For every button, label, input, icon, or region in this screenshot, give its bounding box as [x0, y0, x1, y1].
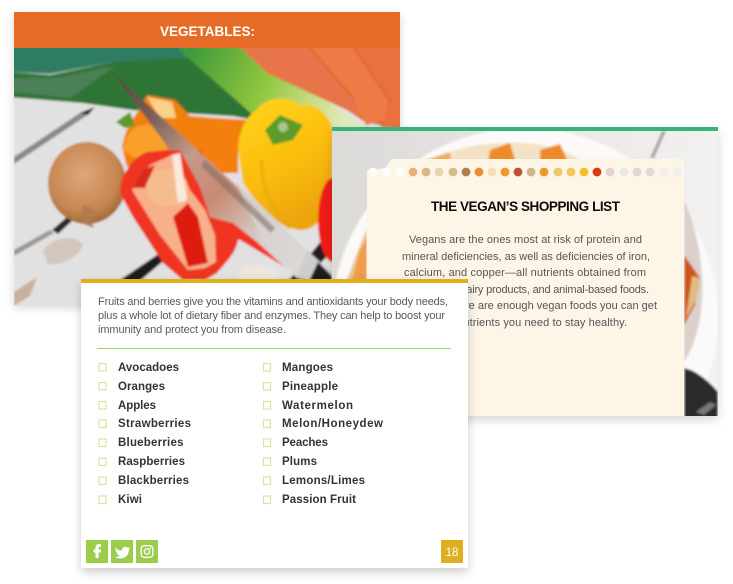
checklist: right column — [264, 362, 383, 506]
checklist: left column: Oranges — [118, 381, 165, 393]
text block: fruit intro: plus a whole lot of dietary fiber and enzymes. They can help to boost your — [98, 310, 445, 322]
checklist: right column: Lemons/Limes — [282, 475, 365, 487]
text block: vegan intro: Thankfully, there are enough vegan foods you can get — [394, 300, 657, 312]
checklist: right column: Passion Fruit — [282, 494, 356, 506]
paper note — [367, 159, 684, 416]
checklist: left column: Blueberries — [118, 437, 184, 449]
knife blade — [113, 73, 307, 278]
text block: vegan intro: Vegans are the ones most at risk of protein and — [409, 234, 642, 246]
dark leek leaves — [14, 48, 188, 76]
text block: vegan intro: all the nutrients you need to stay healthy. — [424, 317, 627, 329]
text block: vegan intro: meat, eggs, dairy products, and animal-based foods. — [402, 284, 649, 296]
text block: vegan intro: calcium, and copper—all nutrients obtained from — [404, 267, 646, 279]
bar: gold top — [81, 279, 468, 283]
checklist: left column: Strawberries — [118, 418, 191, 430]
banner: vegetables — [14, 12, 400, 48]
photo: bowl of food — [332, 131, 718, 416]
checklist: right column: Melon/Honeydew — [282, 418, 383, 430]
carrots — [306, 48, 394, 126]
yellow pepper — [238, 99, 333, 230]
icon: instagram — [136, 540, 158, 563]
photo: vegetables on a table — [10, 40, 406, 310]
checklist: left column: Raspberries — [118, 456, 185, 468]
red pepper behind slide two — [316, 177, 332, 264]
checklist: right column: Peaches — [282, 437, 328, 449]
checklist: right column: Plums — [282, 456, 317, 468]
checklist: right column: Pineapple — [282, 381, 338, 393]
text block: fruit intro: Fruits and berries give you the vitamins and antioxidants your body needs, — [98, 296, 448, 308]
perforation holes — [369, 168, 681, 176]
knife handle — [297, 250, 332, 281]
orange pepper — [122, 95, 248, 173]
text block: vegan intro: mineral deficiencies, as well as deficiencies of iron, — [402, 251, 650, 263]
text block: fruit intro: immunity and protect you from disease. — [98, 324, 286, 336]
onion — [48, 142, 126, 224]
checklist: right column: Mangoes — [282, 362, 333, 374]
checklist: left column: Apples — [118, 400, 156, 412]
cut red pepper — [120, 150, 290, 280]
checklist: left column: Avocadoes — [118, 362, 179, 374]
text block: vegan intro — [394, 234, 657, 329]
panel: vegetables slide — [10, 12, 406, 310]
checklist: left column: Blackberries — [118, 475, 189, 487]
page number — [441, 540, 463, 563]
panel: fruit checklist slide — [81, 279, 468, 572]
icon: twitter — [111, 540, 133, 563]
panel: vegan shopping list slide — [328, 127, 722, 424]
page number: 18 — [446, 547, 458, 559]
checklist: left column: Kiwi — [118, 494, 142, 506]
heading: vegetables: VEGETABLES: — [160, 24, 255, 39]
checklist: left column — [99, 362, 191, 506]
light leek stalk — [173, 44, 367, 135]
bar: green top — [332, 127, 718, 131]
text block: fruit intro — [98, 296, 448, 336]
checklist: right column: Watermelon — [282, 400, 353, 412]
heading: the vegan's shopping list: THE VEGAN’S SHOPPING LIST — [431, 199, 621, 214]
icon: facebook — [86, 540, 108, 563]
